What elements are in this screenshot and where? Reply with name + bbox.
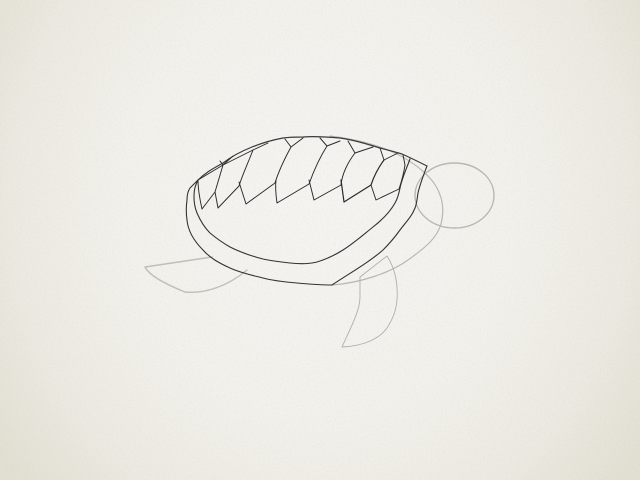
scute 3 [239,147,291,204]
shell top edge [197,137,427,181]
scute 5 [309,153,355,200]
light construction sketch [145,136,494,347]
left flipper [145,257,247,292]
turtle shell [186,137,427,285]
scute 6 [341,160,384,202]
scute 2 [215,150,253,208]
scute 4 [276,146,327,203]
head circle [415,163,494,228]
body outline [330,136,443,285]
scute 1 [198,165,223,209]
shell inner rim [194,159,410,264]
right flipper [342,256,397,347]
shell outer rim [186,166,427,285]
scute 7 [371,165,405,200]
top connectors [220,138,405,165]
